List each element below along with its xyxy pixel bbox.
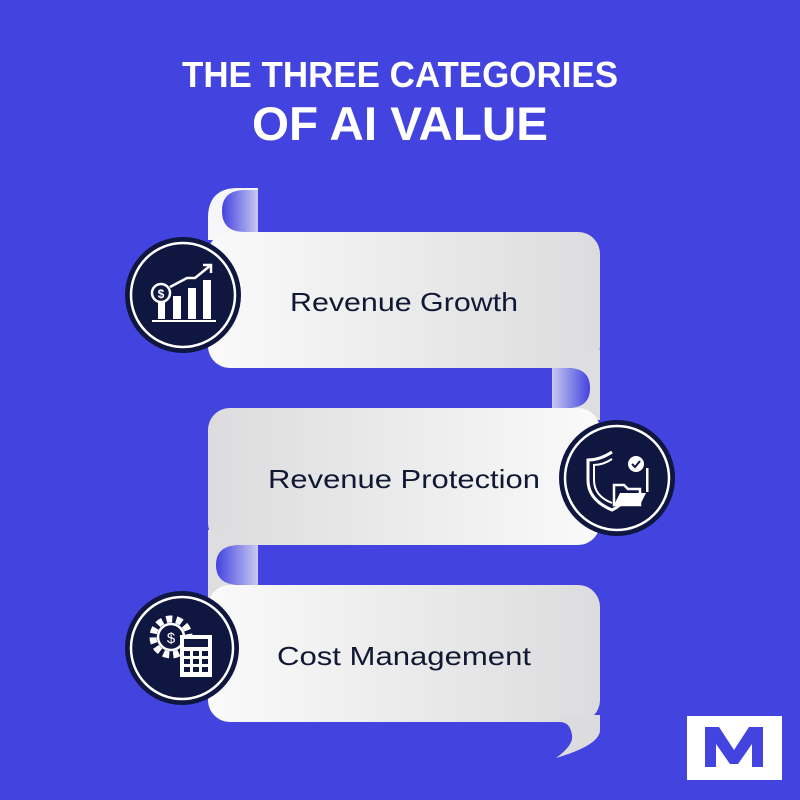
title xyxy=(182,54,618,150)
icon: cost gear calculator: $ xyxy=(167,630,176,647)
logo xyxy=(687,716,782,780)
panel: revenue protection xyxy=(208,408,600,545)
icon: revenue growth chart xyxy=(125,237,241,353)
icon: cost gear calculator xyxy=(125,591,239,705)
title: THE THREE CATEGORIES xyxy=(182,54,618,95)
ribbon tail xyxy=(556,715,600,758)
ribbon top curl xyxy=(208,188,258,240)
panel: revenue protection: Revenue Protection xyxy=(268,464,540,494)
connector right xyxy=(552,350,600,420)
title: OF AI VALUE xyxy=(252,97,548,150)
icon: protection shield xyxy=(559,420,675,536)
panel: revenue growth xyxy=(208,232,600,368)
connector left xyxy=(208,530,258,600)
icon: revenue growth chart: $ xyxy=(158,287,165,301)
panel: cost management: Cost Management xyxy=(277,641,532,671)
panel: cost management xyxy=(208,585,600,722)
panel: revenue growth: Revenue Growth xyxy=(290,287,518,317)
